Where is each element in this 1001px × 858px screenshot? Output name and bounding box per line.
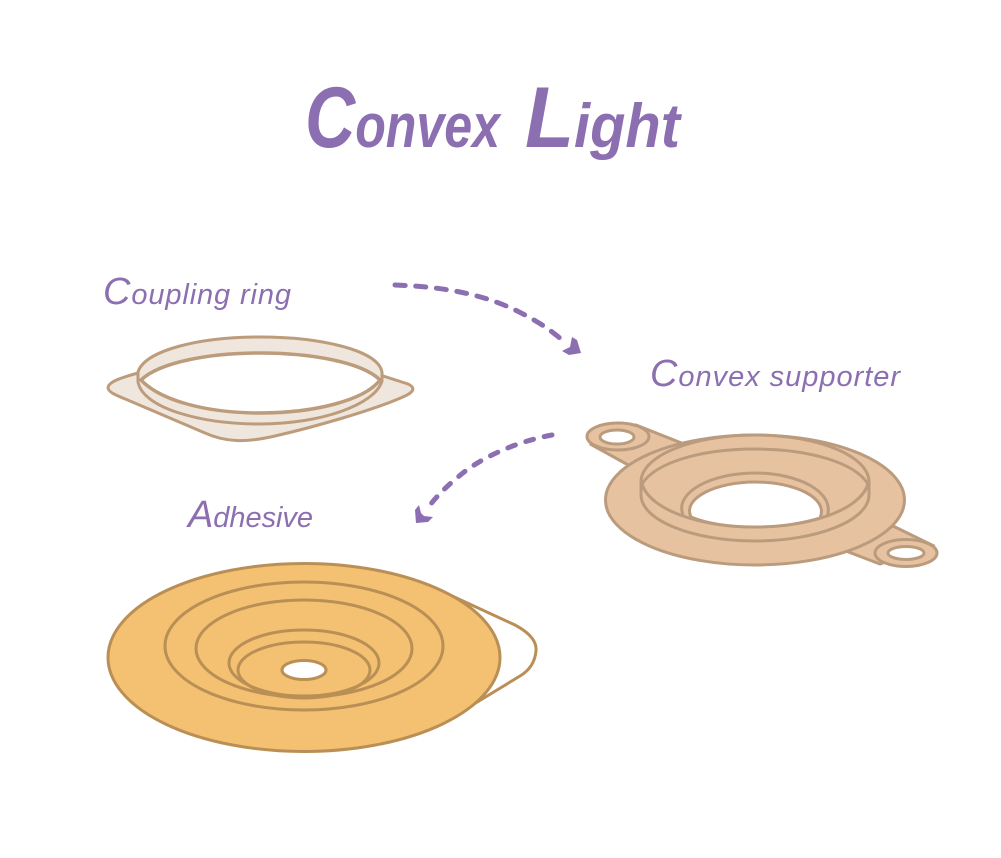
ring 1 bbox=[165, 582, 443, 710]
ring inner edge bbox=[642, 449, 868, 527]
label: coupling ring: Coupling ring bbox=[103, 271, 291, 313]
raised ring bbox=[641, 435, 869, 541]
base wafer bbox=[108, 564, 500, 752]
flange bbox=[108, 373, 413, 441]
inner step bbox=[682, 473, 828, 517]
label: adhesive: Adhesive bbox=[186, 494, 313, 536]
label: convex supporter: Convex supporter bbox=[650, 353, 901, 395]
base ellipse bbox=[606, 435, 904, 565]
ring 3 bbox=[229, 630, 379, 696]
arrow: convex supporter to adhesive bbox=[415, 435, 552, 523]
title bbox=[305, 70, 682, 166]
right tab bbox=[846, 526, 937, 566]
centre hole bbox=[690, 482, 821, 527]
ring opening bbox=[141, 353, 380, 413]
arrow: coupling ring to convex supporter bbox=[395, 285, 581, 355]
illustration: convex supporter bbox=[587, 423, 937, 566]
illustration: coupling ring bbox=[108, 337, 413, 441]
title: Light bbox=[525, 70, 682, 166]
left tab bbox=[587, 423, 684, 466]
illustration: adhesive bbox=[108, 564, 536, 752]
centre hole bbox=[282, 660, 326, 680]
tab bbox=[450, 595, 536, 704]
title: Convex bbox=[305, 70, 502, 166]
ring 2 bbox=[196, 600, 412, 697]
ring 4 bbox=[238, 642, 370, 698]
ring body bbox=[138, 337, 382, 424]
